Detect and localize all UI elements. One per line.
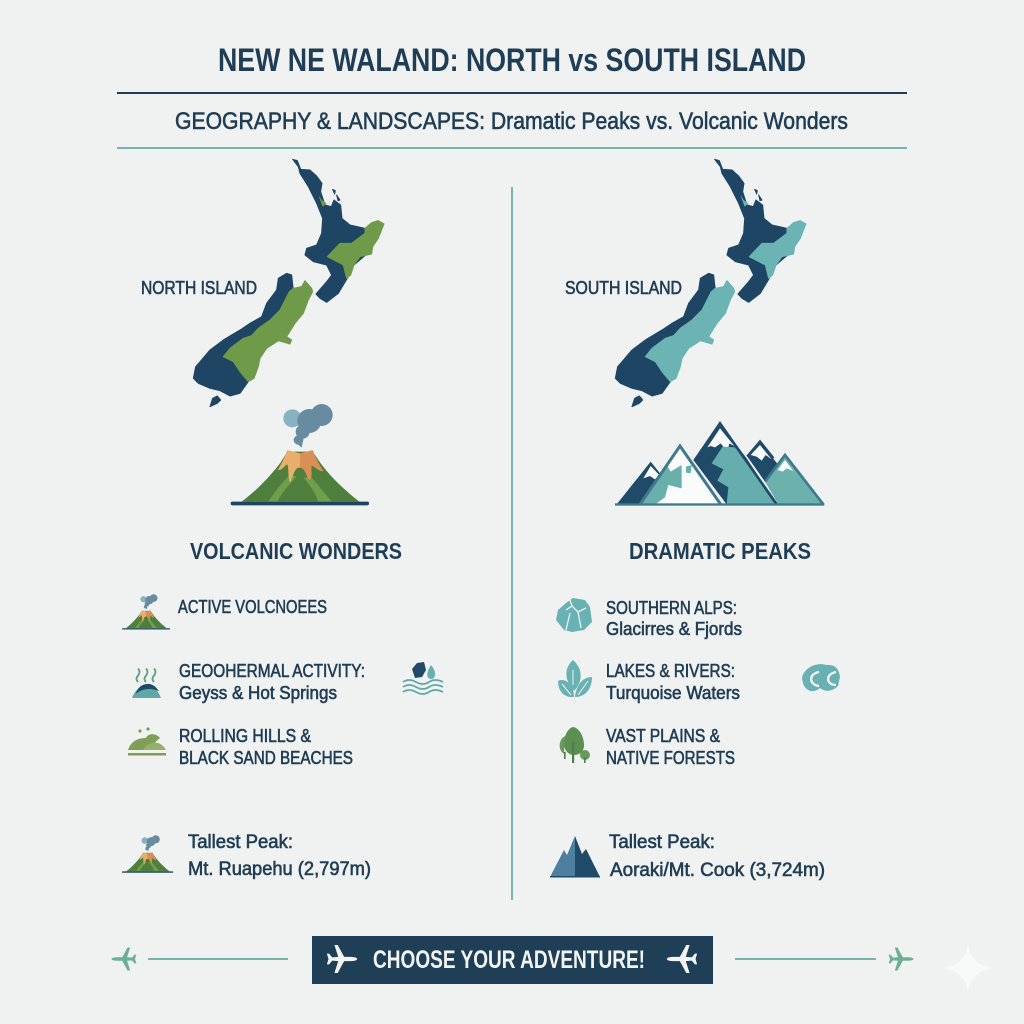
icon: glaciers bbox=[556, 598, 592, 632]
text: plains and forests: NATIVE FORESTS bbox=[606, 748, 735, 768]
icon: large volcano bbox=[231, 404, 369, 505]
icon: trees bbox=[560, 727, 590, 763]
text: tallest peak south: Tallest Peak: bbox=[609, 832, 715, 853]
icon: waves bbox=[802, 664, 840, 691]
text: geothermal activity: Geyss & Hot Springs bbox=[179, 683, 337, 703]
text: rolling hills: ROLLING HILLS & bbox=[179, 726, 311, 746]
text: lakes and rivers bbox=[606, 661, 740, 703]
title: NEW NE WALAND: NORTH vs SOUTH ISLAND bbox=[218, 42, 806, 78]
icon: black sand and water bbox=[403, 662, 443, 694]
icon: geothermal steam bbox=[132, 668, 161, 698]
heading: volcanic wonders: VOLCANIC WONDERS bbox=[190, 538, 402, 564]
banner plane right bbox=[667, 945, 697, 973]
banner text: CHOOSE YOUR ADVENTURE! bbox=[373, 946, 645, 974]
text: plains and forests: VAST PLAINS & bbox=[606, 726, 720, 746]
text: active volcanoes: ACTIVE VOLCNOEES bbox=[178, 597, 327, 617]
icon: active volcano bbox=[122, 594, 170, 629]
map: south island highlight bbox=[615, 159, 806, 407]
text: southern alps: Glacirres & Fjords bbox=[606, 619, 742, 639]
map: north island highlight bbox=[193, 159, 384, 407]
text: lakes and rivers: LAKES & RIVERS: bbox=[606, 661, 735, 681]
text: tallest peak north: Tallest Peak: bbox=[188, 832, 293, 853]
icon: aoraki mountain bbox=[550, 836, 600, 878]
text: tallest peak south bbox=[609, 832, 825, 881]
icon: mountain range bbox=[615, 423, 824, 506]
heading: dramatic peaks: DRAMATIC PEAKS bbox=[629, 538, 811, 564]
footer banner bbox=[112, 936, 913, 984]
icon: tallest volcano bbox=[122, 835, 173, 873]
sparkle bbox=[943, 944, 993, 992]
text: plains and forests bbox=[606, 726, 735, 768]
text: southern alps bbox=[606, 598, 742, 639]
text: tallest peak north bbox=[188, 832, 371, 880]
text: lakes and rivers: Turquoise Waters bbox=[606, 683, 740, 703]
left plane outer bbox=[112, 948, 136, 970]
text: rolling hills: BLACK SAND BEACHES bbox=[179, 748, 353, 768]
text: geothermal activity: GEOOHERMAL ACTIVITY: bbox=[179, 661, 365, 681]
icon: rolling hills bbox=[128, 727, 166, 756]
right plane outer bbox=[889, 948, 913, 970]
text: tallest peak south: Aoraki/Mt. Cook (3,724m) bbox=[610, 860, 825, 881]
north island label: NORTH ISLAND bbox=[141, 278, 257, 298]
text: geothermal activity bbox=[179, 661, 365, 703]
subtitle: GEOGRAPHY & LANDSCAPES: Dramatic Peaks vs. Volcanic Wonders bbox=[175, 108, 848, 135]
panel: south island bbox=[550, 159, 840, 881]
panel: north island bbox=[122, 159, 443, 880]
south island label: SOUTH ISLAND bbox=[565, 278, 682, 298]
icon: leaves bbox=[558, 660, 592, 697]
text: southern alps: SOUTHERN ALPS: bbox=[606, 598, 737, 618]
text: tallest peak north: Mt. Ruapehu (2,797m) bbox=[188, 859, 371, 880]
banner plane left bbox=[327, 945, 357, 973]
text: rolling hills bbox=[179, 726, 353, 768]
banner box bbox=[312, 936, 713, 984]
